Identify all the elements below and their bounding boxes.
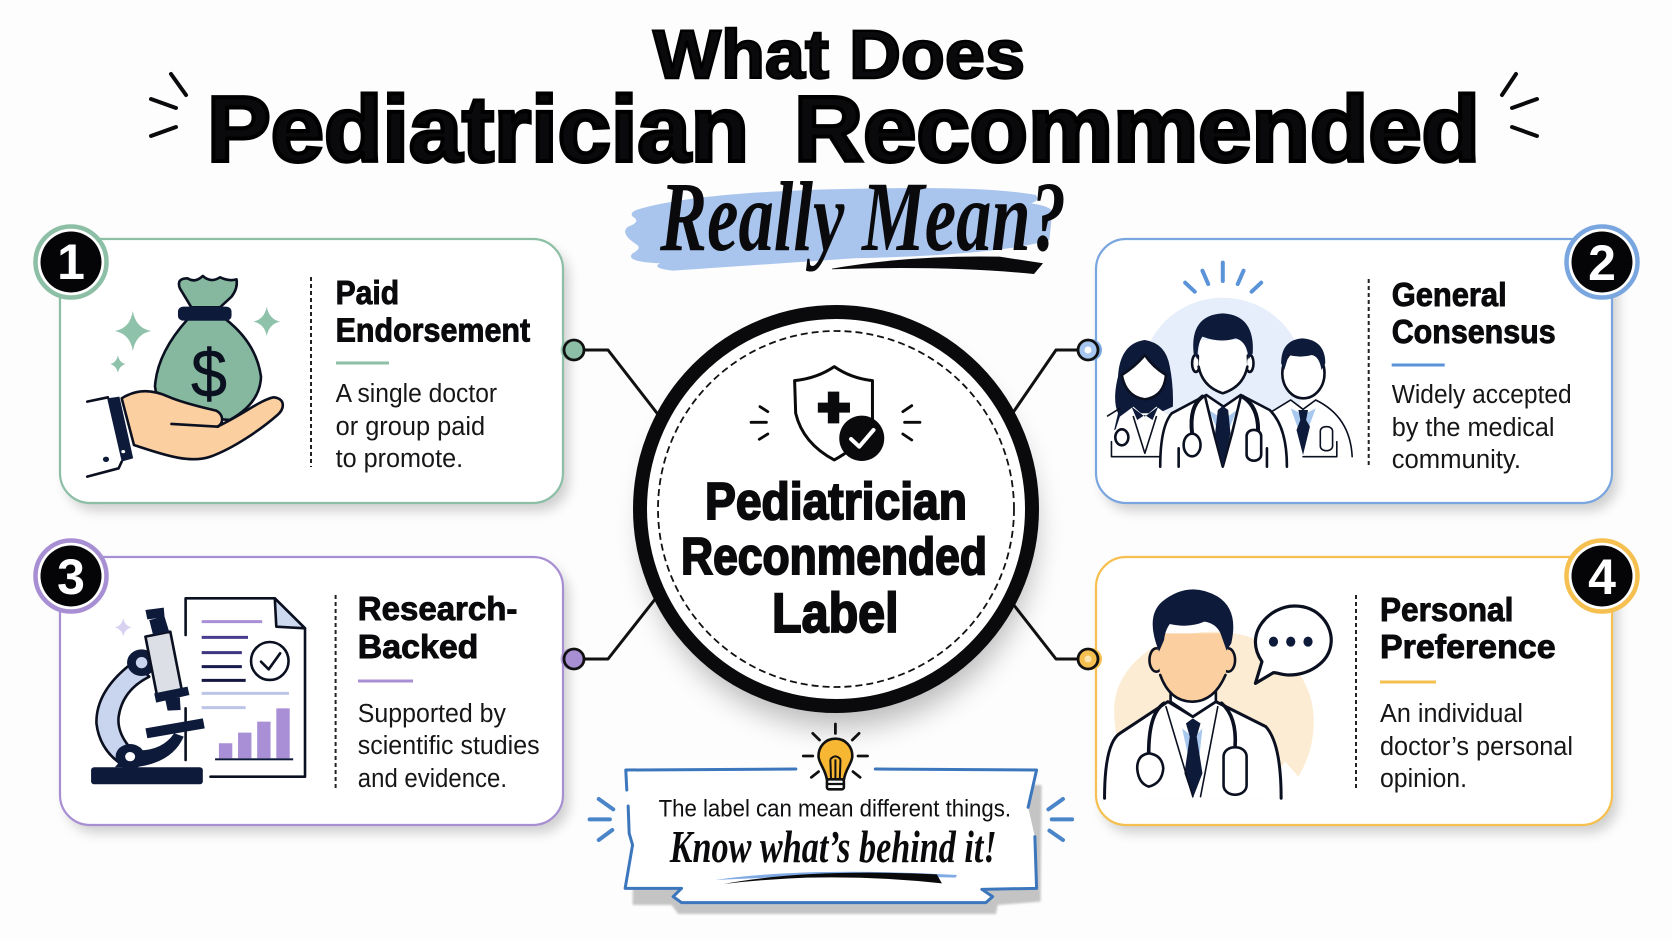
heading: paid endorsement: Endorsement (336, 312, 530, 349)
title sparks left (151, 74, 186, 136)
center circle: pediatrician recommended label (640, 312, 1036, 728)
panel: card 1 paid endorsement (36, 226, 569, 511)
heading: research-backed (358, 590, 517, 665)
panel: card 1 paid endorsement: $ (191, 336, 227, 412)
connector: card 1 to center (560, 339, 660, 417)
heading: general consensus: General (1392, 276, 1507, 313)
text: card 2 description: community. (1392, 446, 1521, 474)
text: card 2 description (1392, 381, 1572, 474)
panel: card 2 general consensus (1096, 226, 1638, 511)
callout: know what's behind it banner (590, 724, 1072, 914)
panel: card 3 research-backed (36, 540, 569, 833)
text: card 3 description: and evidence. (358, 765, 507, 793)
badge 4: 4 (1588, 549, 1616, 605)
text: card 1 description: or group paid (336, 413, 485, 441)
text: card 1 description: to promote. (336, 445, 463, 473)
icon: group of doctors (1108, 263, 1352, 470)
text: card 2 description: Widely accepted (1392, 381, 1572, 409)
text: card 1 description (336, 380, 498, 473)
text: card 3 description: Supported by (358, 700, 506, 728)
heading: general consensus: Consensus (1392, 313, 1556, 350)
text: card 3 description (358, 700, 540, 793)
text: card 1 description: A single doctor (336, 380, 498, 408)
heading: general consensus (1392, 276, 1556, 350)
text: card 2 description: by the medical (1392, 414, 1554, 442)
title sparks right (1502, 74, 1537, 136)
connector: card 4 to center (1013, 604, 1102, 670)
icon: microscope and research document (91, 598, 305, 784)
title: Recommended (794, 77, 1480, 181)
badge 1 (36, 226, 106, 298)
text: center label (681, 473, 987, 644)
title: What Does (653, 16, 1025, 93)
text: card 3 description: scientific studies (358, 732, 540, 760)
title (207, 16, 1480, 181)
text: card 4 description: An individual (1380, 700, 1523, 728)
connector: card 3 to center (560, 598, 656, 670)
text: card 4 description: opinion. (1380, 765, 1467, 793)
connector: card 2 to center (1012, 339, 1102, 414)
text: center label: Reconmended (681, 528, 987, 586)
subtitle: really mean with brush: Really Mean? (659, 161, 1066, 272)
badge 3: 3 (57, 549, 85, 605)
panel: card 4 personal preference (1096, 540, 1638, 833)
text: card 4 description (1380, 700, 1573, 793)
callout: know what's behind it banner: Know what’s behind it! (669, 821, 997, 872)
subtitle: really mean with brush (625, 161, 1066, 274)
badge 1: 1 (57, 234, 85, 290)
badge 4 (1566, 540, 1638, 612)
text: center label: Label (772, 581, 899, 644)
icon: doctor with speech bubble (1105, 589, 1331, 798)
badge 3 (36, 540, 106, 612)
text: card 4 description: doctor’s personal (1380, 733, 1573, 761)
heading: personal preference: Preference (1380, 628, 1556, 665)
title: Pediatrician (207, 77, 749, 181)
icon: shield with plus and check (751, 367, 920, 461)
heading: paid endorsement (336, 274, 530, 349)
icon: money bag in hand (87, 276, 283, 477)
heading: paid endorsement: Paid (336, 274, 399, 311)
callout: know what's behind it banner: The label can mean different things. (659, 796, 1011, 823)
badge 2: 2 (1588, 235, 1616, 291)
heading: research-backed: Backed (358, 628, 478, 665)
icon: light bulb (803, 724, 868, 789)
heading: personal preference: Personal (1380, 591, 1513, 628)
heading: research-backed: Research- (358, 590, 517, 627)
text: center label: Pediatrician (705, 473, 967, 531)
heading: personal preference (1380, 591, 1556, 665)
badge 2 (1566, 226, 1638, 298)
